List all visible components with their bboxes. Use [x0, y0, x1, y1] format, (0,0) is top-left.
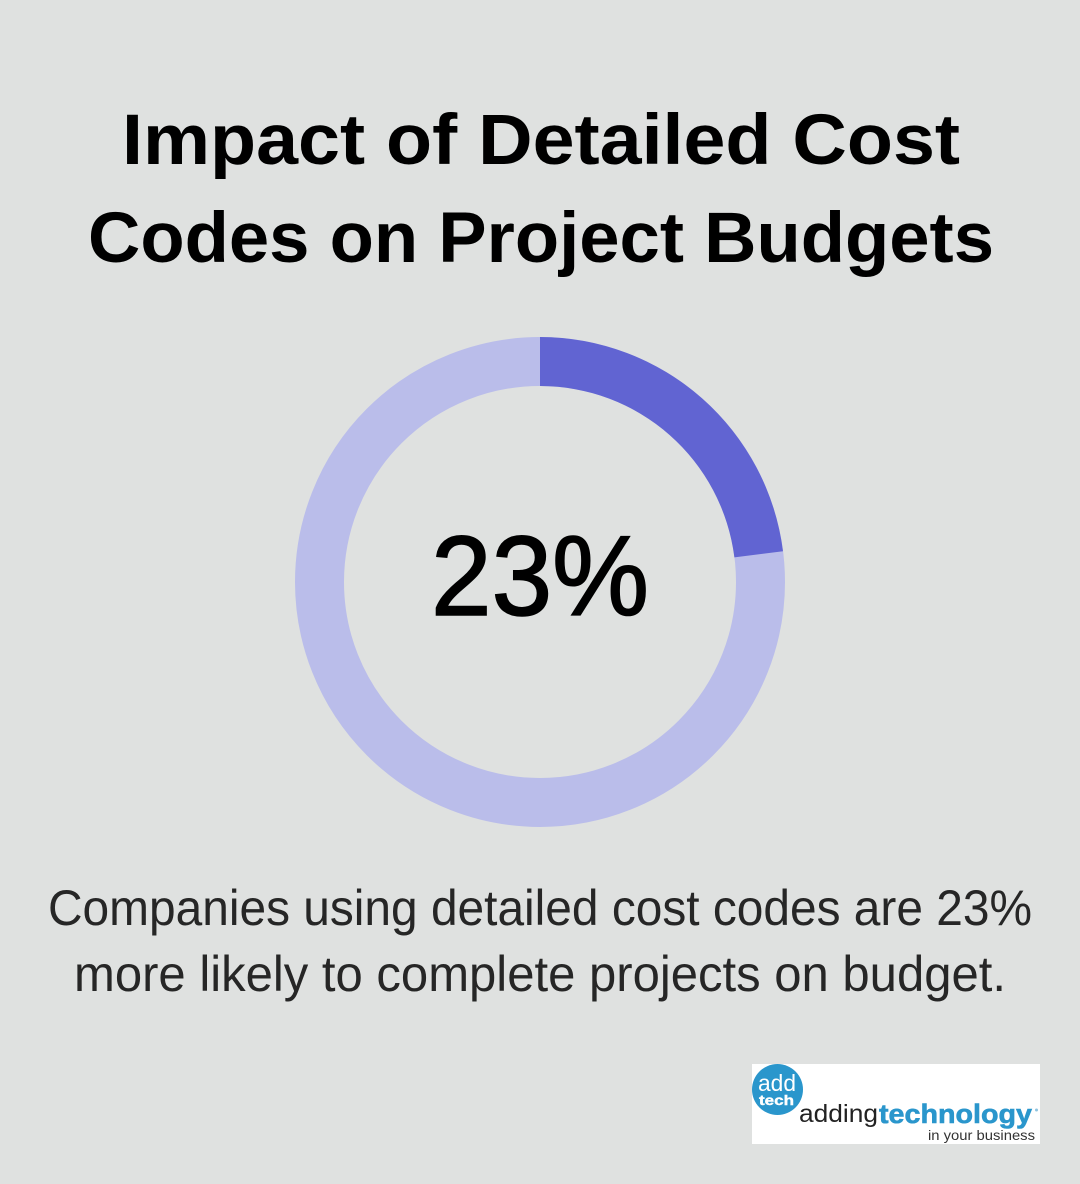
- logo: adding technology: [752, 1064, 1040, 1144]
- icon: add tech badge: add: [758, 1070, 796, 1096]
- title: Impact of Detailed Cost: [122, 101, 960, 180]
- donut value: 23%: [431, 513, 649, 639]
- donut chart: 23%: [320, 337, 783, 802]
- description text: [48, 880, 1032, 1002]
- title: [88, 101, 994, 278]
- icon: add tech badge: tech: [759, 1092, 794, 1108]
- logo wordmark: [799, 1099, 1038, 1129]
- logo wordmark: technology: [879, 1099, 1032, 1129]
- logo tagline: in your business: [928, 1128, 1035, 1143]
- title: Codes on Project Budgets: [88, 199, 994, 278]
- icon: add tech badge: [752, 1064, 803, 1115]
- logo wordmark: adding: [799, 1100, 878, 1128]
- description text: more likely to complete projects on budget.: [74, 946, 1006, 1002]
- description text: Companies using detailed cost codes are 23%: [48, 880, 1032, 936]
